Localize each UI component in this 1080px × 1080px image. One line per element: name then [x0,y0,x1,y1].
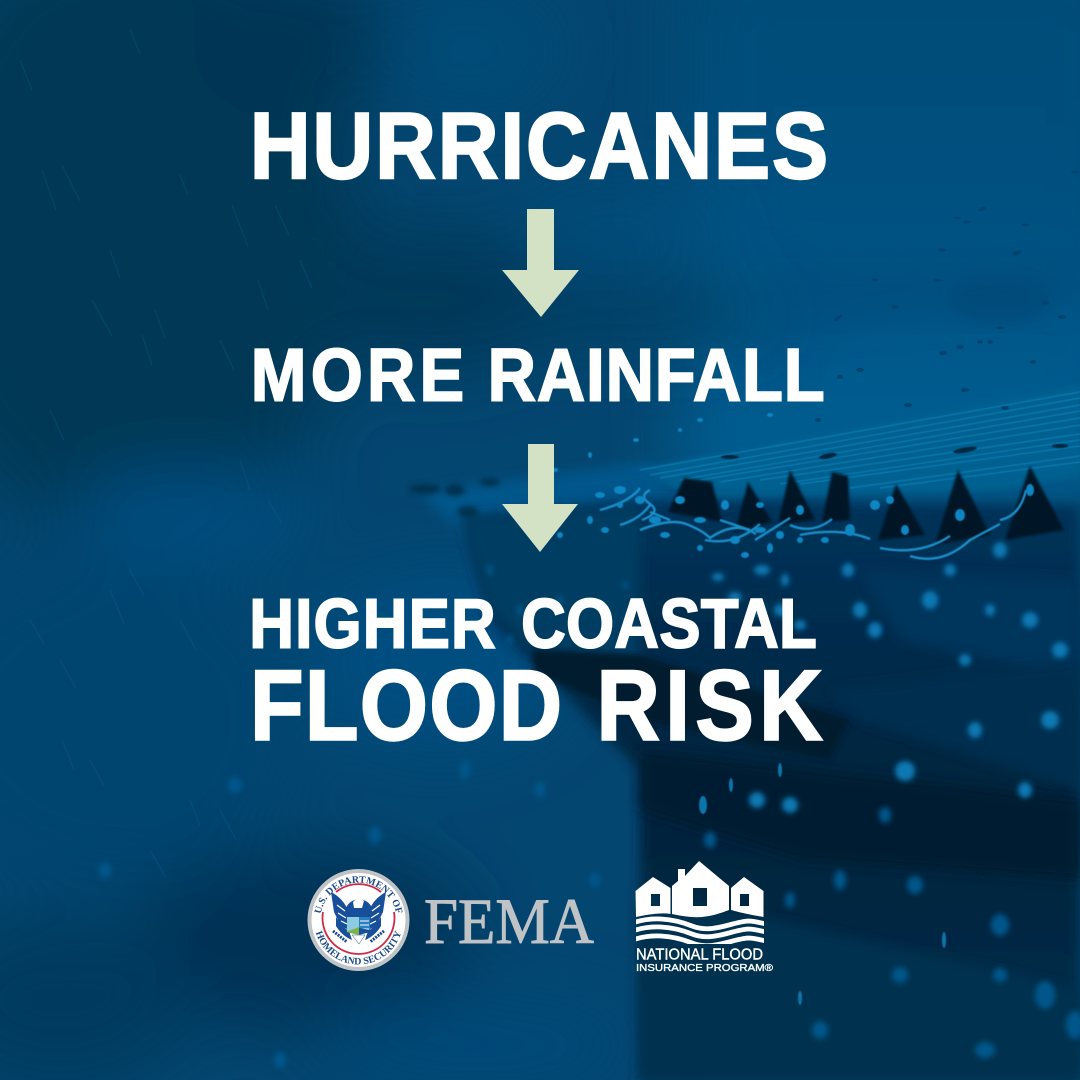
logo: FEMA wordmark: FEMA [424,886,594,958]
text: more: MORE [251,333,464,416]
distant blurred building [770,255,1080,390]
rain streaks [20,30,312,878]
arrow 1 [502,209,579,317]
water splash [600,488,1026,559]
houses [636,877,670,917]
logo: DHS seal [308,869,410,971]
eagle with shield [331,892,386,944]
dark wood fascia [462,500,1080,1080]
logo: National Flood Insurance Program: INSURANCE PROGRAM® [636,962,773,974]
roof eave lit surface [630,385,1080,500]
logo: National Flood Insurance Program [630,861,773,974]
text: coastal: COASTAL [521,584,817,662]
text: flood: FLOOD [250,650,562,761]
arrow 2 [502,444,578,552]
text: rainfall: RAINFALL [488,333,825,416]
logo: DHS seal: U.S. DEPARTMENT OF [314,876,403,913]
blurred far gutter speckle [409,478,500,518]
gutter dark teeth [668,466,1064,545]
text: higher: HIGHER [249,584,496,662]
logo: National Flood Insurance Program: NATIONAL FLOOD [636,946,763,964]
roof corrugation lines [640,392,1080,488]
waves [630,919,770,946]
logo: DHS seal: HOMELAND SECURITY [316,930,401,964]
text: risk: RISK [597,650,822,761]
title: hurricanes: HURRICANES [250,92,828,198]
dark rain marks on upper right [815,171,1079,422]
